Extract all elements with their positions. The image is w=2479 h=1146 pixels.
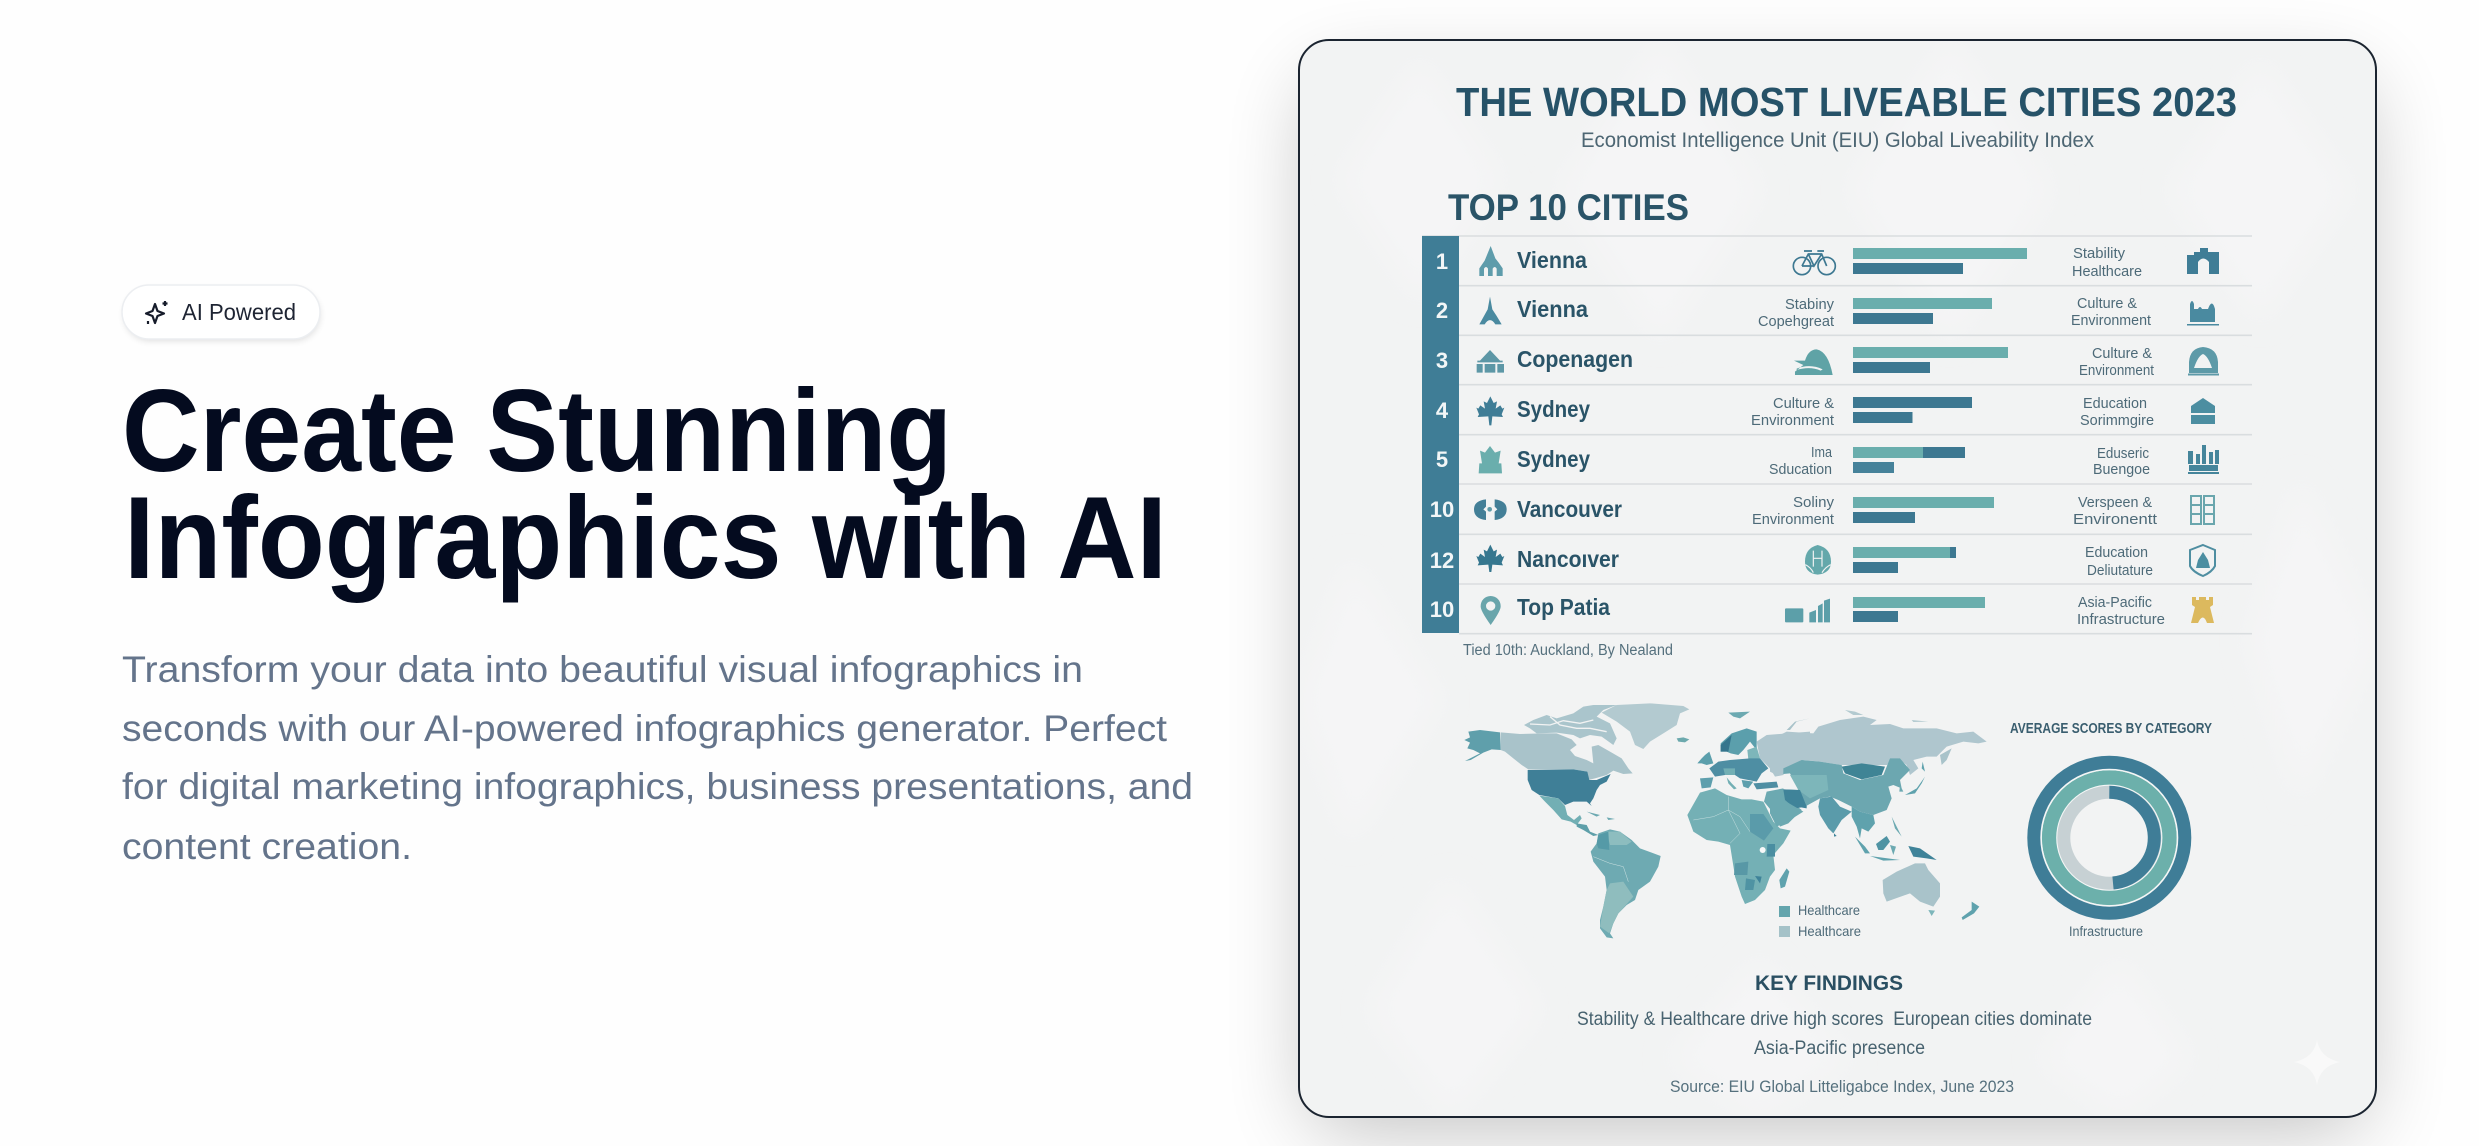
source line: Source: EIU Global Litteligabce Index, June 2023 [1670, 1077, 2014, 1096]
right labels: Environment [2079, 362, 2155, 379]
description paragraph: Transform your data into beautiful visual infographics in [122, 649, 1083, 690]
average scores panel [2010, 721, 2212, 939]
ranking table [1422, 236, 2252, 634]
rank column [1422, 236, 1459, 633]
heading: Create Stunning [122, 365, 952, 496]
mid icons [1785, 251, 1835, 622]
tie note: Tied 10th: Auckland, By Nealand [1463, 642, 1673, 659]
left labels: Ima [1811, 444, 1833, 461]
city names: Top Patia [1517, 594, 1610, 620]
city names [1517, 247, 1633, 620]
city icons [1474, 246, 1507, 625]
map legend [1779, 902, 1861, 939]
left labels: Soliny [1793, 494, 1834, 511]
americas [1464, 703, 1689, 938]
infographic card [1299, 40, 2376, 1130]
findings text [1577, 1009, 2092, 1059]
europe and africa [1687, 712, 1810, 904]
title: THE WORLD MOST LIVEABLE CITIES 2023 [1456, 79, 2237, 125]
description paragraph: content creation. [122, 826, 412, 867]
left labels [1751, 296, 1835, 528]
chart label: Infrastructure [2069, 924, 2143, 939]
map legend: Healthcare [1798, 902, 1860, 918]
city names: Sydney [1517, 396, 1590, 422]
right labels: Verspeen & [2078, 494, 2152, 511]
right labels: Education [2085, 544, 2148, 561]
badge: AI Powered [122, 285, 320, 340]
right labels: Healthcare [2072, 263, 2142, 280]
rank column: 4 [1436, 398, 1449, 423]
subtitle: Economist Intelligence Unit (EIU) Global Liveability Index [1581, 129, 2094, 152]
badge label: AI Powered [182, 299, 296, 325]
rank column: 10 [1430, 497, 1454, 522]
city names: Vienna [1517, 296, 1588, 322]
right labels: Education [2083, 395, 2147, 412]
description paragraph: seconds with our AI-powered infographics generator. Perfect [122, 708, 1168, 749]
left labels: Copehgreat [1758, 313, 1835, 330]
city names: Vancouver [1517, 496, 1622, 522]
left labels: Environment [1752, 511, 1835, 528]
right labels: Culture & [2077, 295, 2137, 312]
city names: Copenagen [1517, 346, 1633, 372]
city names: Vienna [1517, 247, 1587, 273]
icon: dome [1805, 545, 1831, 575]
bars [1853, 248, 2027, 622]
description paragraph [122, 649, 1193, 867]
world map [1464, 703, 1987, 939]
key findings heading: KEY FINDINGS [1755, 972, 1903, 995]
left labels: Sducation [1769, 461, 1832, 478]
right labels: Environentt [2073, 511, 2158, 528]
right labels: Eduseric [2097, 445, 2149, 462]
right labels: Buengoe [2093, 461, 2150, 478]
right labels: Environment [2071, 312, 2152, 329]
rank column: 2 [1436, 298, 1448, 323]
left labels: Environment [1751, 412, 1835, 429]
right labels: Deliutature [2087, 562, 2153, 579]
icon: opera house [1794, 349, 1833, 375]
findings text: Asia-Pacific presence [1754, 1038, 1925, 1059]
hero text column [122, 285, 1193, 867]
asia and oceania [1770, 710, 1987, 920]
right labels: Infrastructure [2077, 611, 2165, 628]
icon: briefcase and bars [1785, 599, 1830, 622]
right labels: Stability [2073, 245, 2125, 262]
right labels: Sorimmgire [2080, 412, 2154, 429]
rank column: 3 [1436, 348, 1448, 373]
right labels: Culture & [2092, 345, 2152, 362]
findings text: Stability & Healthcare drive high scores European cities dominate [1577, 1009, 2092, 1030]
rank column: 12 [1430, 548, 1454, 573]
left labels: Stabiny [1785, 296, 1834, 313]
heading [122, 365, 1167, 603]
chart heading: AVERAGE SCORES BY CATEGORY [2010, 721, 2212, 737]
right labels [2071, 245, 2165, 628]
description paragraph: for digital marketing infographics, business presentations, and [122, 766, 1193, 807]
decorative sparkle [2294, 1040, 2340, 1085]
map legend: Healthcare [1798, 923, 1861, 939]
city names: Sydney [1517, 446, 1590, 472]
right icons [2187, 248, 2219, 623]
heading: Infographics with AI [124, 472, 1167, 603]
rank column: 1 [1436, 249, 1448, 274]
rank column: 10 [1430, 597, 1454, 622]
rank column: 5 [1436, 447, 1448, 472]
city names: Nancoıver [1517, 546, 1619, 572]
right labels: Asia-Pacific [2078, 594, 2152, 611]
donut chart [2034, 762, 2185, 913]
heading: top 10 cities: TOP 10 CITIES [1448, 187, 1689, 228]
icon: bicycle [1793, 251, 1835, 275]
left labels: Culture & [1773, 395, 1834, 412]
icon: sparkles [146, 301, 168, 324]
key findings [1577, 972, 2092, 1096]
